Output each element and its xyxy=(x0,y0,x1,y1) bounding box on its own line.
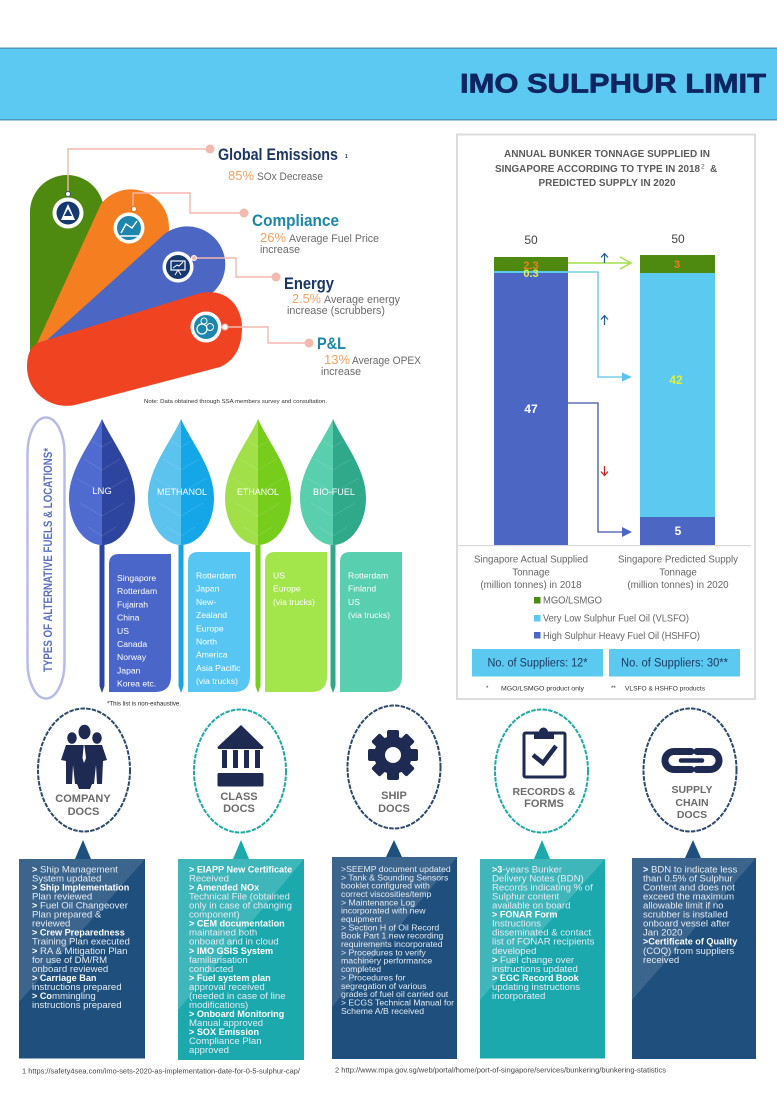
badge: ship docs xyxy=(348,706,440,828)
survey note: Note: Data obtained through SSA members survey and consultation. xyxy=(144,399,327,405)
panel: company docs: > RA & Mitigation Plan xyxy=(32,946,127,957)
card: LNG locations: Singapore xyxy=(117,573,156,583)
panel: supply chain docs: than 0.5% of Sulphur xyxy=(643,874,733,885)
badge: company docs: COMPANY xyxy=(55,793,111,805)
petal: orange xyxy=(34,189,169,350)
card: bio-fuel locations: Rotterdam xyxy=(348,570,388,580)
arrow: MGO xyxy=(568,257,631,269)
supplier box: 2018: No. of Suppliers: 12* xyxy=(488,658,588,670)
panel: supply chain docs: exceed the maximum xyxy=(643,892,734,903)
icon: people xyxy=(61,725,107,789)
icon: institution xyxy=(218,725,264,786)
badge: ship docs: DOCS xyxy=(378,803,410,815)
icon: energy xyxy=(162,252,196,282)
icon: profit and loss xyxy=(190,312,228,342)
metric: global emissions: Global Emissions xyxy=(218,146,338,164)
card: methanol locations: Zealand xyxy=(196,610,227,620)
card: LNG locations: Fujairah xyxy=(117,599,148,609)
petal fan chart xyxy=(27,175,242,406)
panel: class docs xyxy=(178,840,304,1060)
axis label: 2020: Tonnage xyxy=(659,568,697,578)
chart title: PREDICTED SUPPLY IN 2020 xyxy=(538,178,676,189)
metric: P&L: 13% xyxy=(324,352,350,367)
metric: energy: 2.5% xyxy=(292,291,321,306)
non-exhaustive note: *This list is non-exhaustive. xyxy=(107,700,181,708)
panel: company docs: > Ship Management xyxy=(32,864,118,876)
badge: class docs xyxy=(194,710,286,832)
card: LNG locations: China xyxy=(117,613,140,623)
icon: gear xyxy=(368,730,418,780)
card: LNG locations: US xyxy=(117,626,129,636)
supplier footnotes xyxy=(486,685,705,692)
metric: compliance: Average Fuel Price xyxy=(289,233,379,245)
leaf: ethanol xyxy=(225,419,291,693)
panel: records and forms: available on board xyxy=(492,901,570,912)
panel: company docs: System updated xyxy=(32,874,101,885)
panel: class docs: > EIAPP New Certificate xyxy=(189,864,292,874)
panel: supply chain docs xyxy=(632,840,756,1059)
card: LNG locations xyxy=(109,554,171,692)
supplier footnotes: VLSFO & HSHFO products xyxy=(625,686,705,692)
panel: company docs: for use of DM/RM xyxy=(32,955,107,966)
panel: class docs: Compliance Plan xyxy=(189,1036,262,1047)
panel: supply chain docs: >Certificate of Quality xyxy=(643,937,738,947)
stacked bar: 2018 xyxy=(494,233,568,545)
panel: ship docs: > Procedures for xyxy=(341,972,406,982)
metric: P&L: Average OPEX xyxy=(352,355,421,367)
supplier box: 2018 xyxy=(472,649,603,676)
axis label: 2020: Singapore Predicted Supply xyxy=(618,554,738,566)
card: LNG locations: Japan xyxy=(117,665,141,675)
panel: ship docs: > Procedures to verify xyxy=(341,947,426,957)
card: methanol locations xyxy=(188,552,250,692)
panel: company docs: > Carriage Ban xyxy=(32,973,96,983)
metric: P&L: increase xyxy=(321,366,361,378)
card: bio-fuel locations: US xyxy=(348,597,360,607)
chart panel xyxy=(457,134,755,699)
card: ethanol locations xyxy=(265,552,327,692)
panel: records and forms: Delivery Notes (BDN) xyxy=(492,874,584,885)
axis line xyxy=(458,545,751,546)
arrow: VLSFO xyxy=(568,272,632,382)
panel: company docs: Plan reviewed xyxy=(32,892,92,903)
panel: supply chain docs: received xyxy=(643,955,679,966)
panel: records and forms xyxy=(480,840,605,1058)
arrow: HSHFO xyxy=(568,403,632,537)
panel: company docs: > Crew Preparedness xyxy=(32,928,125,938)
metric: P&L: P&L xyxy=(317,335,346,353)
metric: global emissions xyxy=(218,146,348,183)
leaf: ethanol: ETHANOL xyxy=(237,487,279,498)
leaf: LNG: LNG xyxy=(92,486,112,497)
panel: ship docs: grades of fuel oil carried out xyxy=(341,989,449,999)
petal: red xyxy=(27,292,242,406)
card: ethanol locations: (via trucks) xyxy=(273,597,315,607)
vertical label pill xyxy=(28,418,64,698)
panel: company docs: > Ship Implementation xyxy=(32,883,129,893)
panel: records and forms: > FONAR Form xyxy=(492,910,557,920)
card: methanol locations: Japan xyxy=(196,584,220,594)
panel: ship docs: >SEEMP document updated xyxy=(341,864,451,874)
panel: company docs xyxy=(19,840,145,1058)
panel: class docs: > Onboard Monitoring xyxy=(189,1009,284,1019)
metric: global emissions: SOx Decrease xyxy=(257,171,323,183)
supplier footnotes: * xyxy=(486,685,489,692)
panel: class docs: Technical File (obtained xyxy=(189,892,290,903)
card: methanol locations: Rotterdam xyxy=(196,570,236,580)
title: IMO SULPHUR LIMIT xyxy=(460,69,767,99)
stacked bar: 2018: 50 xyxy=(524,233,538,247)
panel: class docs: > Fuel system plan xyxy=(189,973,271,983)
badge: supply chain docs xyxy=(644,708,736,832)
legend: Very Low Sulphur Fuel Oil (VLSFO) xyxy=(543,614,689,624)
stacked bar: 2018: 0.3 xyxy=(523,268,539,280)
panel: company docs: instructions prepared xyxy=(32,982,122,993)
supplier footnotes: ** xyxy=(611,685,616,692)
panel: records and forms: updating instructions xyxy=(492,982,580,993)
panel: records and forms: instructions updated xyxy=(492,964,578,975)
panel: class docs: approval received xyxy=(189,982,265,993)
axis label: 2018: (million tonnes) in 2018 xyxy=(480,580,582,591)
panel: company docs: > Fuel Oil Changeover xyxy=(32,901,128,912)
badge: class docs: CLASS xyxy=(220,791,258,803)
chart title: & xyxy=(710,164,717,175)
badge: supply chain docs: DOCS xyxy=(677,809,707,821)
icon: clipboard check xyxy=(524,728,565,777)
header banner xyxy=(0,48,777,120)
panel: records and forms: >3-years Bunker xyxy=(492,864,562,876)
panel: ship docs xyxy=(332,840,457,1059)
panel: class docs: Received xyxy=(189,874,229,885)
panel: ship docs: > Section H of Oil Record xyxy=(341,922,439,932)
footnote 2: 2 http://www.mpa.gov.sg/web/portal/home/port-of-singapore/services/bunkering/bunkering-statistics xyxy=(335,1066,666,1074)
petal: blue xyxy=(36,226,225,350)
panel: records and forms: > EGC Record Book xyxy=(492,973,580,983)
panel: ship docs: > Maintenance Log xyxy=(341,897,415,907)
card: bio-fuel locations xyxy=(340,552,402,692)
axis label: 2018: Singapore Actual Supplied xyxy=(474,554,588,566)
panel: class docs: maintained both xyxy=(189,928,257,939)
metric: P&L xyxy=(317,335,421,378)
leaf: bio-fuel: BIO-FUEL xyxy=(313,487,355,498)
legend: MGO/LSMGO xyxy=(543,596,602,606)
panel: records and forms: Records indicating % of xyxy=(492,883,593,894)
panel: supply chain docs: > BDN to indicate less xyxy=(643,864,737,876)
card: LNG locations: Canada xyxy=(117,639,147,649)
card: ethanol locations: US xyxy=(273,570,285,580)
badge: records and forms: RECORDS & xyxy=(512,786,576,798)
supplier box: 2020 xyxy=(609,649,740,676)
panel: records and forms: Sulphur content xyxy=(492,892,560,903)
panel: supply chain docs: (COQ) from suppliers xyxy=(643,946,734,957)
panel: ship docs: machinery performance xyxy=(341,956,432,966)
metric: global emissions: 85% xyxy=(228,168,254,183)
panel: supply chain docs: allowable limit if no xyxy=(643,901,724,912)
panel: class docs: conducted xyxy=(189,964,233,975)
panel: supply chain docs: onboard vessel after xyxy=(643,919,731,930)
panel: company docs: Training Plan executed xyxy=(32,937,130,948)
metric: compliance: 26% xyxy=(260,230,286,245)
axis label: 2018: Tonnage xyxy=(512,568,550,578)
metric: compliance: increase xyxy=(260,244,300,256)
panel: class docs: > IMO GSIS System xyxy=(189,946,273,956)
badge: records and forms xyxy=(495,710,588,832)
panel: records and forms: disseminated & contact xyxy=(492,928,592,939)
leaf: methanol xyxy=(148,419,214,693)
panel: ship docs: Scheme A/B received xyxy=(341,1006,424,1016)
panel: class docs: familiarisation xyxy=(189,955,248,966)
panel: class docs: modifications) xyxy=(189,1000,248,1011)
panel: class docs: > Amended NOx xyxy=(189,883,259,893)
badge: company docs: DOCS xyxy=(68,806,99,818)
footnote 1: 1 https://safety4sea.com/imo-sets-2020-as-implementation-date-for-0-5-sulphur-cap/ xyxy=(22,1066,300,1076)
chart title: SINGAPORE ACCORDING TO TYPE IN 2018 xyxy=(495,164,700,175)
panel: class docs: only in case of changing xyxy=(189,901,292,912)
panel: company docs: reviewed xyxy=(32,919,70,930)
metric: energy xyxy=(284,275,401,317)
chart title: 2 xyxy=(701,164,705,170)
legend xyxy=(534,596,700,642)
panel: class docs: (needed in case of line xyxy=(189,991,286,1002)
panel: records and forms: incorporated xyxy=(492,991,545,1002)
chart title: ANNUAL BUNKER TONNAGE SUPPLIED IN xyxy=(504,149,710,160)
panel: class docs: component) xyxy=(189,910,240,921)
metric: energy: Average energy xyxy=(324,294,401,306)
panel: ship docs: > Tank & Sounding Sensors xyxy=(341,872,449,882)
stacked bar: 2020: 5 xyxy=(675,524,682,538)
chart title xyxy=(495,149,717,189)
icon: emissions xyxy=(52,192,84,228)
panel: supply chain docs: scrubber is installed xyxy=(643,910,728,921)
panel: class docs: > CEM documentation xyxy=(189,919,285,929)
metric: global emissions: 1 xyxy=(345,154,348,160)
stacked bar: 2020: 3 xyxy=(674,259,680,271)
card: methanol locations: (via trucks) xyxy=(196,676,238,686)
metric: energy: increase (scrubbers) xyxy=(287,305,385,317)
card: bio-fuel locations: Finland xyxy=(348,584,376,594)
supplier box: 2020: No. of Suppliers: 30** xyxy=(621,658,729,670)
badge: supply chain docs: CHAIN xyxy=(675,797,709,809)
metric: compliance: Compliance xyxy=(252,212,339,230)
card: LNG locations: Korea etc. xyxy=(117,679,156,689)
leaf: methanol: METHANOL xyxy=(157,487,207,498)
panel: records and forms: list of FONAR recipients xyxy=(492,937,595,948)
supplier footnotes: MGO/LSMGO product only xyxy=(501,686,585,692)
panel: records and forms: > Fuel change over xyxy=(492,955,574,966)
card: LNG locations: Rotterdam xyxy=(117,586,157,596)
panel: ship docs: equipment xyxy=(341,914,382,924)
panel: ship docs: completed xyxy=(341,964,381,974)
panel: ship docs: incorporated with new xyxy=(341,906,426,916)
badge: class docs: DOCS xyxy=(223,803,255,815)
metric: compliance xyxy=(252,212,379,256)
panel: ship docs: correct viscosities/temp xyxy=(341,889,431,899)
stacked bar: 2020: 50 xyxy=(671,232,685,246)
vertical label pill: TYPES OF ALTERNATIVE FUELS & LOCATIONS* xyxy=(41,448,55,672)
badge: supply chain docs: SUPPLY xyxy=(671,784,713,796)
panel: records and forms: Instructions xyxy=(492,919,541,930)
connector lines xyxy=(68,144,314,348)
panel: class docs: approved xyxy=(189,1045,229,1056)
legend: High Sulphur Heavy Fuel Oil (HSHFO) xyxy=(543,631,700,642)
leaf: bio-fuel xyxy=(300,419,366,693)
trend arrows xyxy=(601,254,608,476)
panel: company docs: onboard reviewed xyxy=(32,964,108,975)
card: LNG locations: Norway xyxy=(117,652,147,662)
panel: ship docs: booklet configured with xyxy=(341,881,430,891)
card: methanol locations: New- xyxy=(196,597,216,607)
panel: ship docs: > ECGS Technical Manual for xyxy=(341,997,454,1007)
panel: supply chain docs: Jan 2020 xyxy=(643,928,682,939)
axis label: 2020: (million tonnes) in 2020 xyxy=(627,580,729,591)
petal: green xyxy=(30,175,104,352)
badge: records and forms: FORMS xyxy=(524,798,564,810)
panel: ship docs: Book Part 1 new recording xyxy=(341,931,444,941)
card: methanol locations: North xyxy=(196,636,217,646)
panel: records and forms: developed xyxy=(492,946,536,957)
stacked bar: 2018: 2.3 xyxy=(523,260,539,272)
card: methanol locations: Europe xyxy=(196,623,224,633)
stacked bar: 2020 xyxy=(640,232,715,545)
stacked bar: 2020: 42 xyxy=(669,373,683,387)
metric: energy: Energy xyxy=(284,275,335,293)
panel: company docs: > Commingling xyxy=(32,991,96,1002)
card: bio-fuel locations: (via trucks) xyxy=(348,610,390,620)
badge: company docs xyxy=(38,708,130,832)
panel: class docs: onboard and in cloud xyxy=(189,937,279,948)
card: methanol locations: Asia Pacific xyxy=(196,663,241,673)
panel: ship docs: requirements incorporated xyxy=(341,939,443,949)
card: methanol locations: America xyxy=(196,650,228,660)
panel: supply chain docs: Content and does not xyxy=(643,883,735,894)
panel: class docs: Manual approved xyxy=(189,1018,263,1029)
leaf: LNG xyxy=(69,419,135,693)
icon: chain link xyxy=(665,752,719,770)
panel: class docs: > SOX Emission xyxy=(189,1027,259,1037)
card: ethanol locations: Europe xyxy=(273,584,301,594)
badge: ship docs: SHIP xyxy=(381,790,407,802)
panel: company docs: instructions prepared xyxy=(32,1000,122,1011)
panel: company docs: Plan prepared & xyxy=(32,910,102,921)
icon: compliance xyxy=(114,206,144,244)
stacked bar: 2018: 47 xyxy=(524,402,538,416)
panel: ship docs: segregation of various xyxy=(341,981,427,991)
